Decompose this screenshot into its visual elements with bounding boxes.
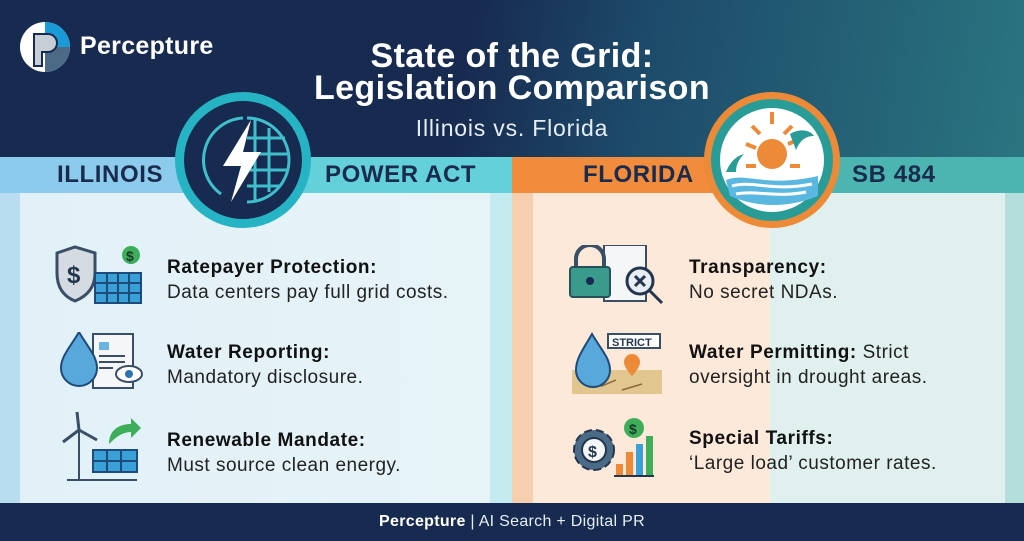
icon: wind turbine + solar xyxy=(62,412,141,481)
illinois panel background xyxy=(0,193,512,503)
icon: water drop + document xyxy=(60,332,143,389)
header background xyxy=(0,0,1024,157)
item: water permitting: oversight in drought areas. xyxy=(689,367,927,388)
icon: lock + magnifier xyxy=(569,245,663,304)
illinois band xyxy=(0,157,512,193)
label: SB 484: SB 484 xyxy=(852,161,936,188)
item: water reporting xyxy=(60,332,363,389)
title xyxy=(314,37,710,107)
footer xyxy=(0,503,1024,541)
item: ratepayer protection: Ratepayer Protection: xyxy=(167,257,377,278)
label: FLORIDA: FLORIDA xyxy=(583,161,694,188)
icon: gear + chart: $ xyxy=(629,421,637,437)
logo xyxy=(20,22,214,72)
icon: gear + chart: $ xyxy=(588,444,597,461)
item: water permitting: Water Permitting: Strict xyxy=(689,342,909,363)
item: transparency: No secret NDAs. xyxy=(689,282,838,303)
florida band xyxy=(512,157,1024,193)
item: renewable mandate xyxy=(62,412,401,481)
item: water reporting: Mandatory disclosure. xyxy=(167,367,363,388)
icon: shield: $ xyxy=(67,262,81,289)
icon: drop + strict sign xyxy=(572,332,662,394)
icon: shield: $ xyxy=(126,248,134,264)
florida panel background xyxy=(512,193,1024,503)
logo: Percepture xyxy=(80,32,214,60)
item: special tariffs: ‘Large load’ customer rates. xyxy=(689,453,937,474)
icon: illinois power emblem xyxy=(175,92,311,228)
item: ratepayer protection xyxy=(56,245,449,304)
item: ratepayer protection: Data centers pay full grid costs. xyxy=(167,282,449,303)
item: renewable mandate: Must source clean energy. xyxy=(167,455,401,476)
icon: florida sun emblem xyxy=(704,92,840,228)
item: water permitting xyxy=(572,332,927,394)
icon: gear + chart xyxy=(573,418,654,477)
title: State of the Grid: xyxy=(370,37,654,75)
item: special tariffs: Special Tariffs: xyxy=(689,428,833,449)
item: water reporting: Water Reporting: xyxy=(167,342,330,363)
subtitle: Illinois vs. Florida xyxy=(416,115,608,141)
footer: Percepture | AI Search + Digital PR xyxy=(379,513,645,530)
item: renewable mandate: Renewable Mandate: xyxy=(167,430,366,451)
label: POWER ACT: POWER ACT xyxy=(325,161,476,188)
icon: shield xyxy=(56,245,142,304)
icon: drop + strict sign: STRICT xyxy=(612,337,652,349)
label: ILLINOIS: ILLINOIS xyxy=(57,161,163,188)
item: transparency xyxy=(569,245,838,304)
item: special tariffs xyxy=(573,418,937,477)
title: Legislation Comparison xyxy=(314,69,710,107)
item: transparency: Transparency: xyxy=(689,257,827,278)
